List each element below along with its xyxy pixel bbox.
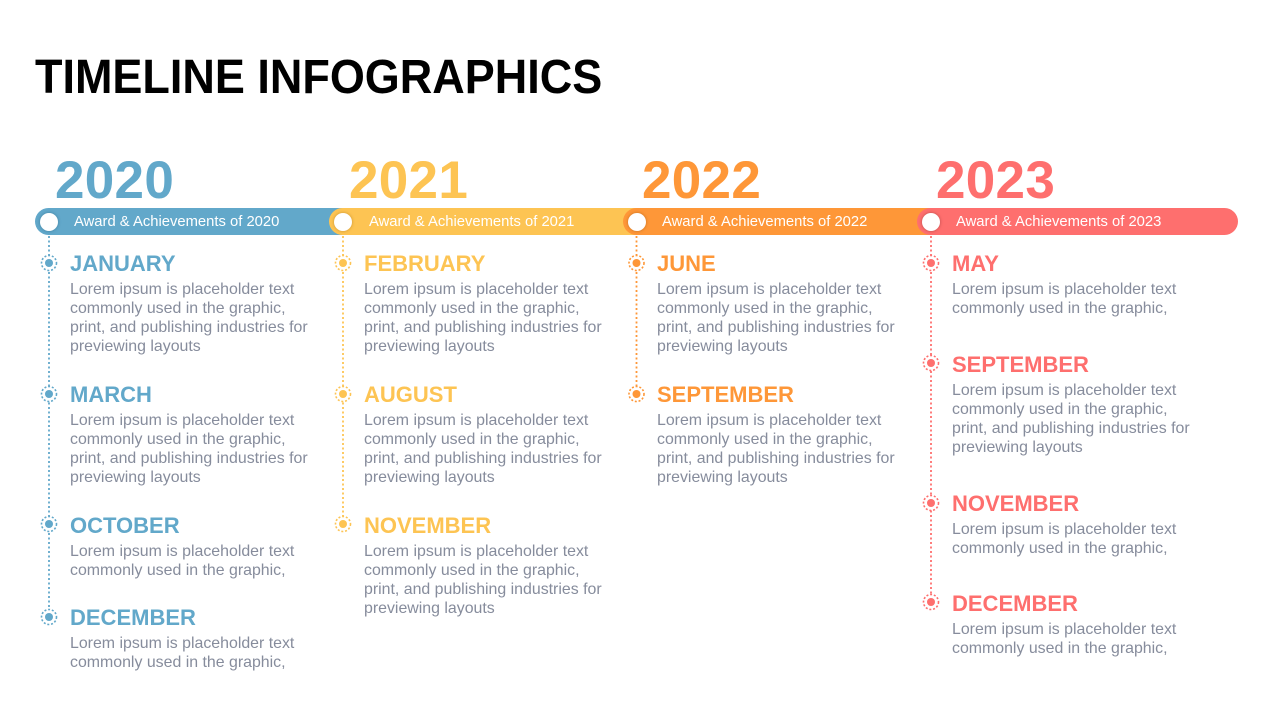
entry: December: DECEMBER [70,605,196,630]
entry: December: commonly used in the graphic, [70,654,286,671]
entry: January: print, and publishing industries for [70,319,308,336]
panel: 2021 [334,236,602,617]
entry: December: commonly used in the graphic, [952,640,1168,657]
entry: November: print, and publishing industries for [364,581,602,598]
knob 2021 [334,213,352,231]
knob 2022 [628,213,646,231]
dotted connector and markers 2022 [628,236,645,402]
entry: February [364,251,602,355]
entry: March [70,382,308,486]
year 2023: 2023 [936,151,1055,210]
entry: February: print, and publishing industries for [364,319,602,336]
entry: August [364,382,602,486]
entry: November: NOVEMBER [952,491,1079,516]
dotted connector and markers 2021 [334,236,352,532]
bar label 2020: Award & Achievements of 2020 [74,214,279,230]
entry: December: Lorem ipsum is placeholder text [952,621,1176,638]
entry: November: commonly used in the graphic, [364,562,580,579]
entry: December: DECEMBER [952,591,1078,616]
entry: September: Lorem ipsum is placeholder text [952,382,1176,399]
entry: June: print, and publishing industries for [657,319,895,336]
dotted connector and markers 2020 [40,236,58,626]
entry: September: SEPTEMBER [657,382,794,407]
entry: February: commonly used in the graphic, [364,300,580,317]
entry: August: Lorem ipsum is placeholder text [364,412,588,429]
panel: 2020 [40,236,308,671]
entry: March: print, and publishing industries for [70,450,308,467]
panel: 2023 [922,236,1190,657]
entry: March: commonly used in the graphic, [70,431,286,448]
entry: September: print, and publishing industries for [952,420,1190,437]
entry: June: commonly used in the graphic, [657,300,873,317]
entry: September: previewing layouts [952,439,1083,456]
entry: November: Lorem ipsum is placeholder text [952,521,1176,538]
entry: October: Lorem ipsum is placeholder text [70,543,294,560]
entry: September: print, and publishing industries for [657,450,895,467]
entry: January [70,251,308,355]
entry: January: Lorem ipsum is placeholder text [70,281,294,298]
entry: December [70,605,294,671]
segment 2022 [623,208,943,235]
entry: September: commonly used in the graphic, [657,431,873,448]
entry: November: NOVEMBER [364,513,491,538]
entry: November: commonly used in the graphic, [952,540,1168,557]
year 2022: 2022 [642,151,761,210]
entry: August: AUGUST [364,382,457,407]
entry: November [364,513,602,617]
segment 2021 [329,208,649,235]
entry: September: previewing layouts [657,469,788,486]
panel: 2022 [628,236,895,486]
bar label 2022: Award & Achievements of 2022 [662,214,867,230]
entry: February: previewing layouts [364,338,495,355]
timeline bar [35,208,1238,235]
entry: August: print, and publishing industries for [364,450,602,467]
entry: December: Lorem ipsum is placeholder text [70,635,294,652]
entry: August: commonly used in the graphic, [364,431,580,448]
dotted connector and markers 2023 [922,236,940,610]
entry: February: FEBRUARY [364,251,485,276]
bar label 2021: Award & Achievements of 2021 [369,214,574,230]
entry: May: Lorem ipsum is placeholder text [952,281,1176,298]
entry: September [952,352,1190,456]
entry: March: MARCH [70,382,152,407]
year 2020: 2020 [55,151,174,210]
entry: June: JUNE [657,251,716,276]
knob 2023 [922,213,940,231]
entry: June [657,251,895,355]
entry: November [952,491,1176,557]
entry: December [952,591,1176,657]
entry: October: OCTOBER [70,513,180,538]
entry: September: Lorem ipsum is placeholder text [657,412,881,429]
entry: January: previewing layouts [70,338,201,355]
segment 2023 [917,208,1238,235]
entry: September [657,382,895,486]
entry: June: Lorem ipsum is placeholder text [657,281,881,298]
entry: May: commonly used in the graphic, [952,300,1168,317]
entry: September: SEPTEMBER [952,352,1089,377]
knob 2020 [40,213,58,231]
year 2021: 2021 [349,151,468,210]
title: TIMELINE INFOGRAPHICS [35,51,602,104]
segment 2020 [35,208,355,235]
bar label 2023: Award & Achievements of 2023 [956,214,1161,230]
entry: September: commonly used in the graphic, [952,401,1168,418]
entry: November: previewing layouts [364,600,495,617]
entry: October: commonly used in the graphic, [70,562,286,579]
entry: March: previewing layouts [70,469,201,486]
entry: June: previewing layouts [657,338,788,355]
entry: May: MAY [952,251,999,276]
entry: January: commonly used in the graphic, [70,300,286,317]
entry: October [70,513,294,579]
entry: March: Lorem ipsum is placeholder text [70,412,294,429]
entry: November: Lorem ipsum is placeholder text [364,543,588,560]
entry: August: previewing layouts [364,469,495,486]
entry: January: JANUARY [70,251,176,276]
entry: May [952,251,1176,317]
entry: February: Lorem ipsum is placeholder text [364,281,588,298]
